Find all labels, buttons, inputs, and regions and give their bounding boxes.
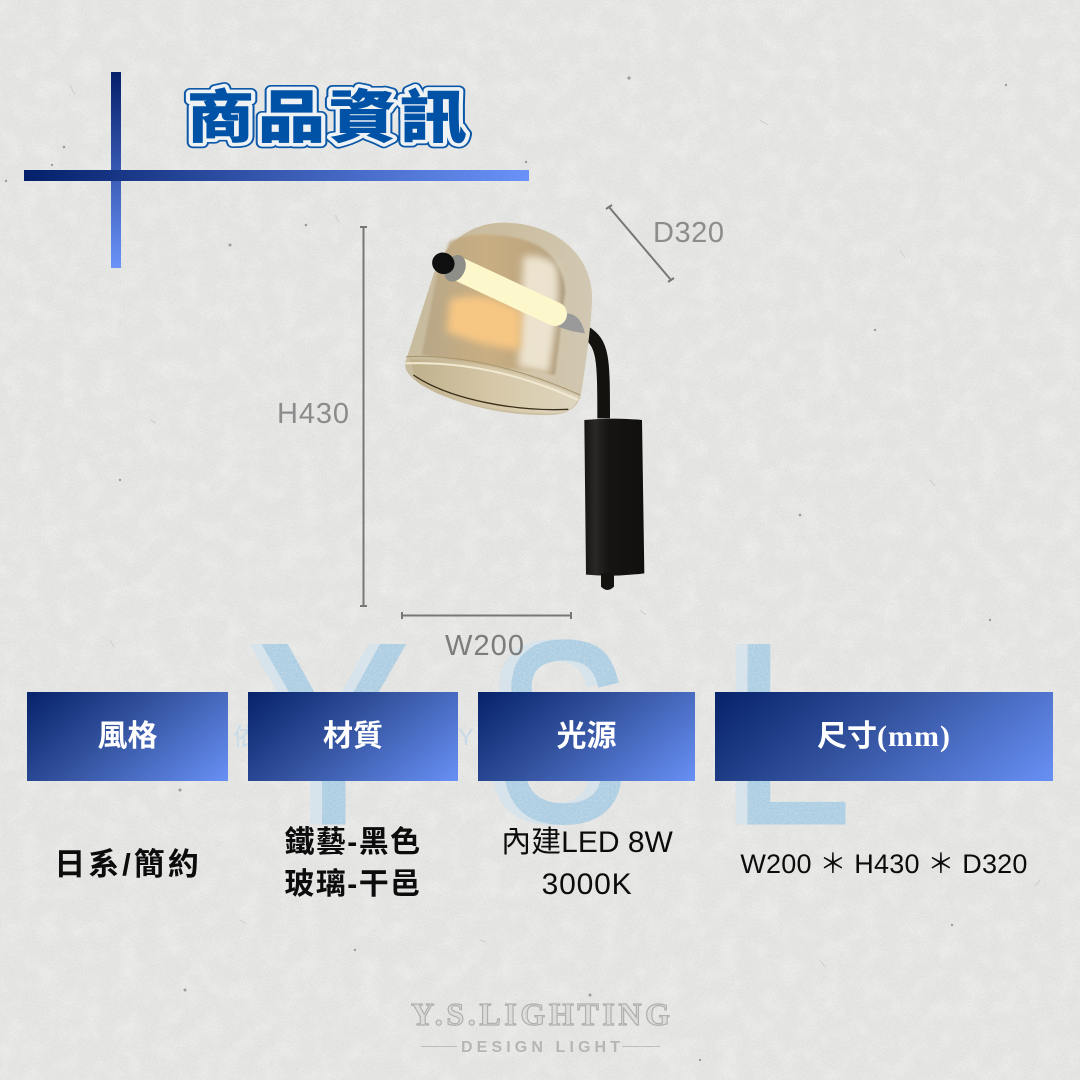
title: 商品資訊: 商品資訊: [187, 87, 471, 150]
value: light source: 內建LED 8W: [501, 826, 673, 859]
watermark: YSL letters: S: [485, 588, 618, 876]
watermark: YSL letters: L: [719, 590, 840, 878]
cross rule: horizontal bar: [24, 170, 529, 181]
watermark: small tagline fragments: [233, 724, 474, 751]
title: 商品資訊: 商品資訊: [187, 87, 471, 150]
watermark: YSL letters: [247, 588, 852, 878]
dimension line: depth: [606, 205, 674, 282]
header: 風格: [27, 692, 228, 781]
logo tagline: DESIGN LIGHT: [461, 1039, 620, 1056]
header: 尺寸(mm): [715, 692, 1053, 781]
dimension label: H430: H430: [277, 398, 349, 430]
tagline left rule: [421, 1046, 457, 1048]
value: dimensions: W200 ＊ H430 ＊ D320: [740, 849, 1028, 879]
watermark: small tagline fragments: 依: [233, 724, 257, 751]
watermark: small tagline fragments: Y: [458, 724, 474, 751]
dimension label: D320: D320: [653, 217, 724, 249]
header: 風格: 風格: [98, 720, 158, 753]
cross rule: vertical bar: [111, 72, 121, 268]
watermark: YSL letters: L: [731, 590, 852, 878]
title: 商品資訊: 商品資訊: [187, 87, 471, 150]
dimension line: height: [360, 227, 367, 606]
watermark: YSL letters: Y: [259, 590, 409, 878]
logo wordmark: Y.S.LIGHTING: [411, 996, 670, 1032]
watermark: YSL letters: Y: [247, 590, 397, 878]
dimension line: width: [402, 612, 571, 619]
header: 材質: [248, 692, 458, 781]
value: material: 鐵藝-黑色: [284, 826, 422, 859]
value: material: 玻璃-干邑: [284, 868, 422, 901]
header: 材質: 材質: [323, 720, 383, 753]
watermark: YSL letters: S: [497, 588, 630, 876]
header: 尺寸(mm): 尺寸(mm): [817, 720, 951, 753]
tagline right rule: [622, 1046, 660, 1048]
header: 光源: 光源: [556, 720, 616, 753]
header: 光源: [478, 692, 695, 781]
value: material: [284, 826, 422, 901]
value: style: 日系/簡約: [54, 847, 202, 882]
dimension label: W200: W200: [445, 630, 524, 662]
icon: wall lamp: [405, 223, 644, 590]
value: light source: [501, 826, 673, 901]
value: light source: 3000K: [542, 868, 632, 901]
